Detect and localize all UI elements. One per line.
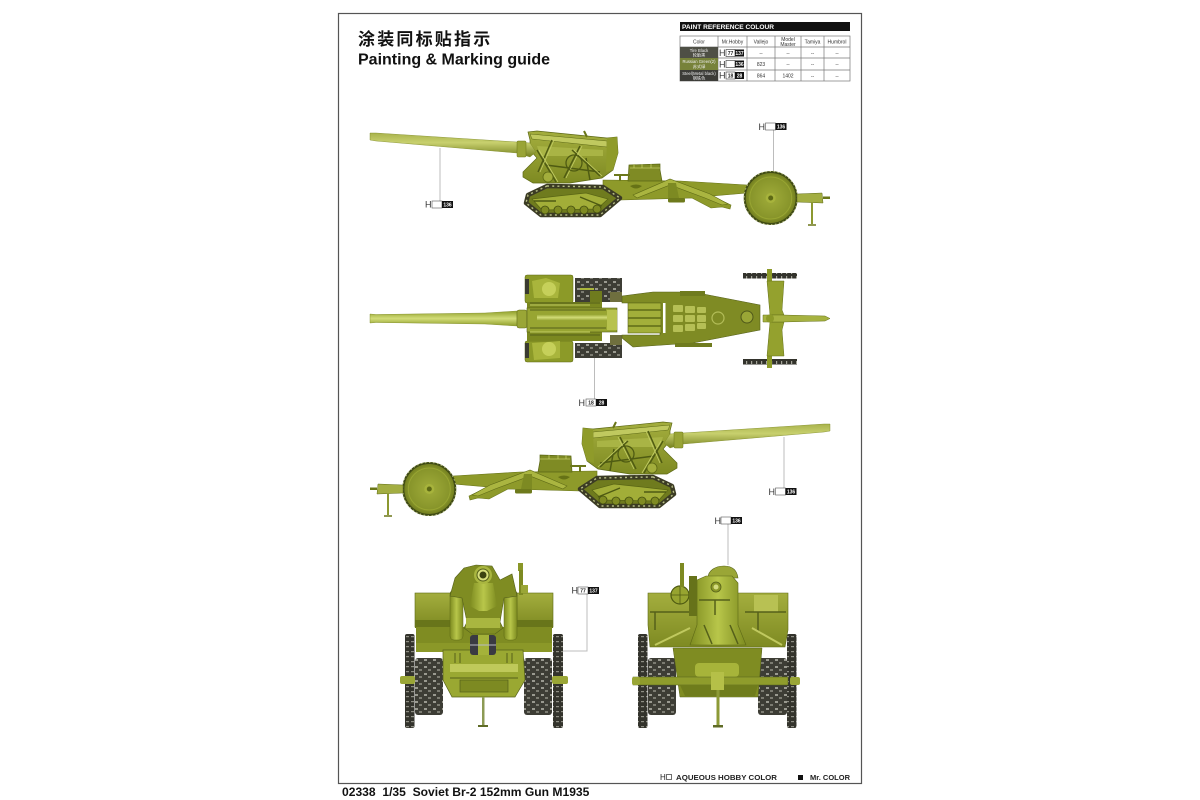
table column headers: Mr.Hobby bbox=[722, 40, 744, 46]
tow bar bbox=[763, 314, 830, 322]
row codes: tire black: 137 bbox=[735, 51, 744, 57]
row codes: russian green: H bbox=[719, 60, 726, 70]
legend: AQUEOUS HOBBY COLOR bbox=[676, 773, 778, 782]
swatch: tire black: 轮胎黑 bbox=[693, 52, 705, 58]
swatch: steel: Steel(Metal black) bbox=[682, 71, 716, 76]
sight bbox=[518, 563, 528, 595]
callout: front wheel H77 137: 77 bbox=[580, 588, 586, 594]
gun carriage and cradle bbox=[523, 131, 618, 183]
row codes: tire black: -- bbox=[835, 50, 839, 56]
table column headers: Tamiya bbox=[805, 40, 821, 46]
table heading: PAINT REFERENCE COLOUR bbox=[682, 24, 774, 31]
table column headers: Humbrol bbox=[828, 40, 846, 46]
callout: front wheel H77 137: H bbox=[572, 586, 578, 596]
row codes: steel: 28 bbox=[737, 74, 742, 80]
swatch: russian green: 苏式绿 bbox=[693, 63, 706, 70]
swatch: russian green: Russian Green(2) bbox=[682, 59, 716, 64]
row codes: steel: -- bbox=[811, 74, 814, 80]
title bbox=[358, 29, 550, 68]
swatch: tire black bbox=[680, 47, 718, 58]
legend: Mr. COLOR bbox=[810, 773, 850, 782]
ammunition box bbox=[614, 164, 662, 181]
barrel bbox=[370, 133, 536, 157]
central trail bbox=[622, 291, 760, 347]
inner tracks bbox=[415, 658, 552, 715]
swatch: steel: 钢铁色 bbox=[693, 74, 706, 82]
tow bar and stand bbox=[797, 193, 830, 225]
row codes: russian green bbox=[719, 60, 839, 70]
callout: barrel H136 bbox=[425, 148, 453, 210]
callout: wheel H136: 136 bbox=[777, 124, 785, 130]
row codes: tire black: -- bbox=[759, 50, 763, 56]
table grid bbox=[680, 36, 850, 81]
row codes: steel: H bbox=[719, 70, 726, 80]
callout: tracks H18 28: 18 bbox=[588, 400, 594, 406]
rear axle bbox=[632, 672, 800, 696]
gun front view bbox=[400, 563, 568, 728]
page frame bbox=[338, 14, 862, 784]
shields and lower structure bbox=[648, 593, 788, 697]
row codes: tire black: H bbox=[719, 48, 726, 58]
inner tracks bbox=[648, 658, 787, 715]
shields and lower body bbox=[415, 593, 553, 652]
gun side view facing right bbox=[370, 422, 830, 516]
row codes: steel: 864 bbox=[757, 74, 765, 80]
trail bbox=[603, 179, 747, 209]
legend: H bbox=[660, 773, 666, 782]
handwheel and sight bbox=[671, 563, 697, 616]
callout: barrel right H136 bbox=[768, 437, 796, 497]
callout: wheel H136: H bbox=[758, 122, 765, 132]
title: 涂装同标贴指示 bbox=[358, 29, 492, 49]
row codes: russian green: -- bbox=[811, 62, 814, 68]
callout: rear view H136: 136 bbox=[732, 518, 741, 524]
central chassis bbox=[443, 650, 525, 697]
callout: barrel H136: 136 bbox=[443, 202, 452, 208]
callout: tracks H18 28: 28 bbox=[599, 400, 604, 406]
upper tracks and wheel group bbox=[525, 275, 622, 303]
table column headers bbox=[693, 37, 846, 48]
callout: rear view H136: H bbox=[714, 516, 721, 526]
callout: front wheel H77 137 bbox=[563, 586, 599, 651]
row codes: steel: 1402 bbox=[782, 74, 794, 80]
table column headers: Color bbox=[693, 40, 705, 46]
table heading bbox=[680, 22, 850, 31]
gun rear view bbox=[632, 563, 800, 728]
callout: barrel right H136: 136 bbox=[787, 490, 795, 496]
gun side view facing left bbox=[370, 131, 830, 225]
row codes: tire black: 77 bbox=[728, 51, 733, 57]
legend bbox=[660, 773, 850, 782]
table column headers: Master bbox=[780, 42, 796, 48]
table column headers: Vallejo bbox=[754, 40, 769, 46]
callout: barrel right H136: H bbox=[768, 487, 775, 497]
title: Painting & Marking guide bbox=[358, 52, 550, 68]
table column headers: Model bbox=[781, 37, 795, 43]
ground stand bbox=[713, 690, 723, 728]
row codes: tire black: -- bbox=[786, 50, 790, 56]
breech block bbox=[690, 566, 746, 645]
callout: tracks H18 28: H bbox=[578, 398, 585, 408]
row codes: tire black: -- bbox=[811, 50, 814, 56]
row codes: steel: -- bbox=[835, 74, 839, 80]
row codes: russian green: 823 bbox=[757, 62, 765, 68]
row codes: steel bbox=[719, 70, 839, 80]
callout: tracks H18 28 bbox=[578, 358, 607, 408]
callout: barrel H136: H bbox=[425, 200, 432, 210]
transport axle and wheels bbox=[743, 269, 797, 368]
cradle and recoil assembly bbox=[517, 291, 622, 345]
callout: rear view H136 bbox=[714, 516, 742, 565]
outer wheels bbox=[400, 634, 568, 728]
barrel bbox=[370, 311, 517, 326]
callout: wheel H136 bbox=[758, 122, 786, 171]
recoil cylinders bbox=[450, 590, 517, 655]
breech housing and barrel bbox=[450, 565, 517, 634]
row codes: russian green: -- bbox=[786, 62, 790, 68]
row codes: steel: 18 bbox=[728, 74, 733, 80]
paint reference table bbox=[680, 22, 850, 82]
swatch: steel bbox=[680, 70, 718, 82]
swatch: russian green bbox=[680, 58, 718, 70]
swatch: tire black: Tire Black bbox=[690, 48, 709, 53]
lower tracks and wheel group bbox=[525, 341, 622, 362]
carriage wheel bbox=[744, 171, 797, 225]
row codes: tire black bbox=[719, 48, 839, 58]
gun top view bbox=[370, 269, 830, 368]
tracks bbox=[526, 186, 620, 215]
outer wheels bbox=[638, 634, 796, 728]
footer product line: 02338 1/35 Soviet Br-2 152mm Gun M1935 bbox=[342, 785, 590, 799]
row codes: russian green: -- bbox=[835, 62, 839, 68]
ground stand bbox=[478, 697, 488, 727]
ammunition box bbox=[628, 303, 661, 333]
callout: front wheel H77 137: 137 bbox=[589, 588, 598, 594]
row codes: russian green: 136 bbox=[735, 62, 744, 68]
